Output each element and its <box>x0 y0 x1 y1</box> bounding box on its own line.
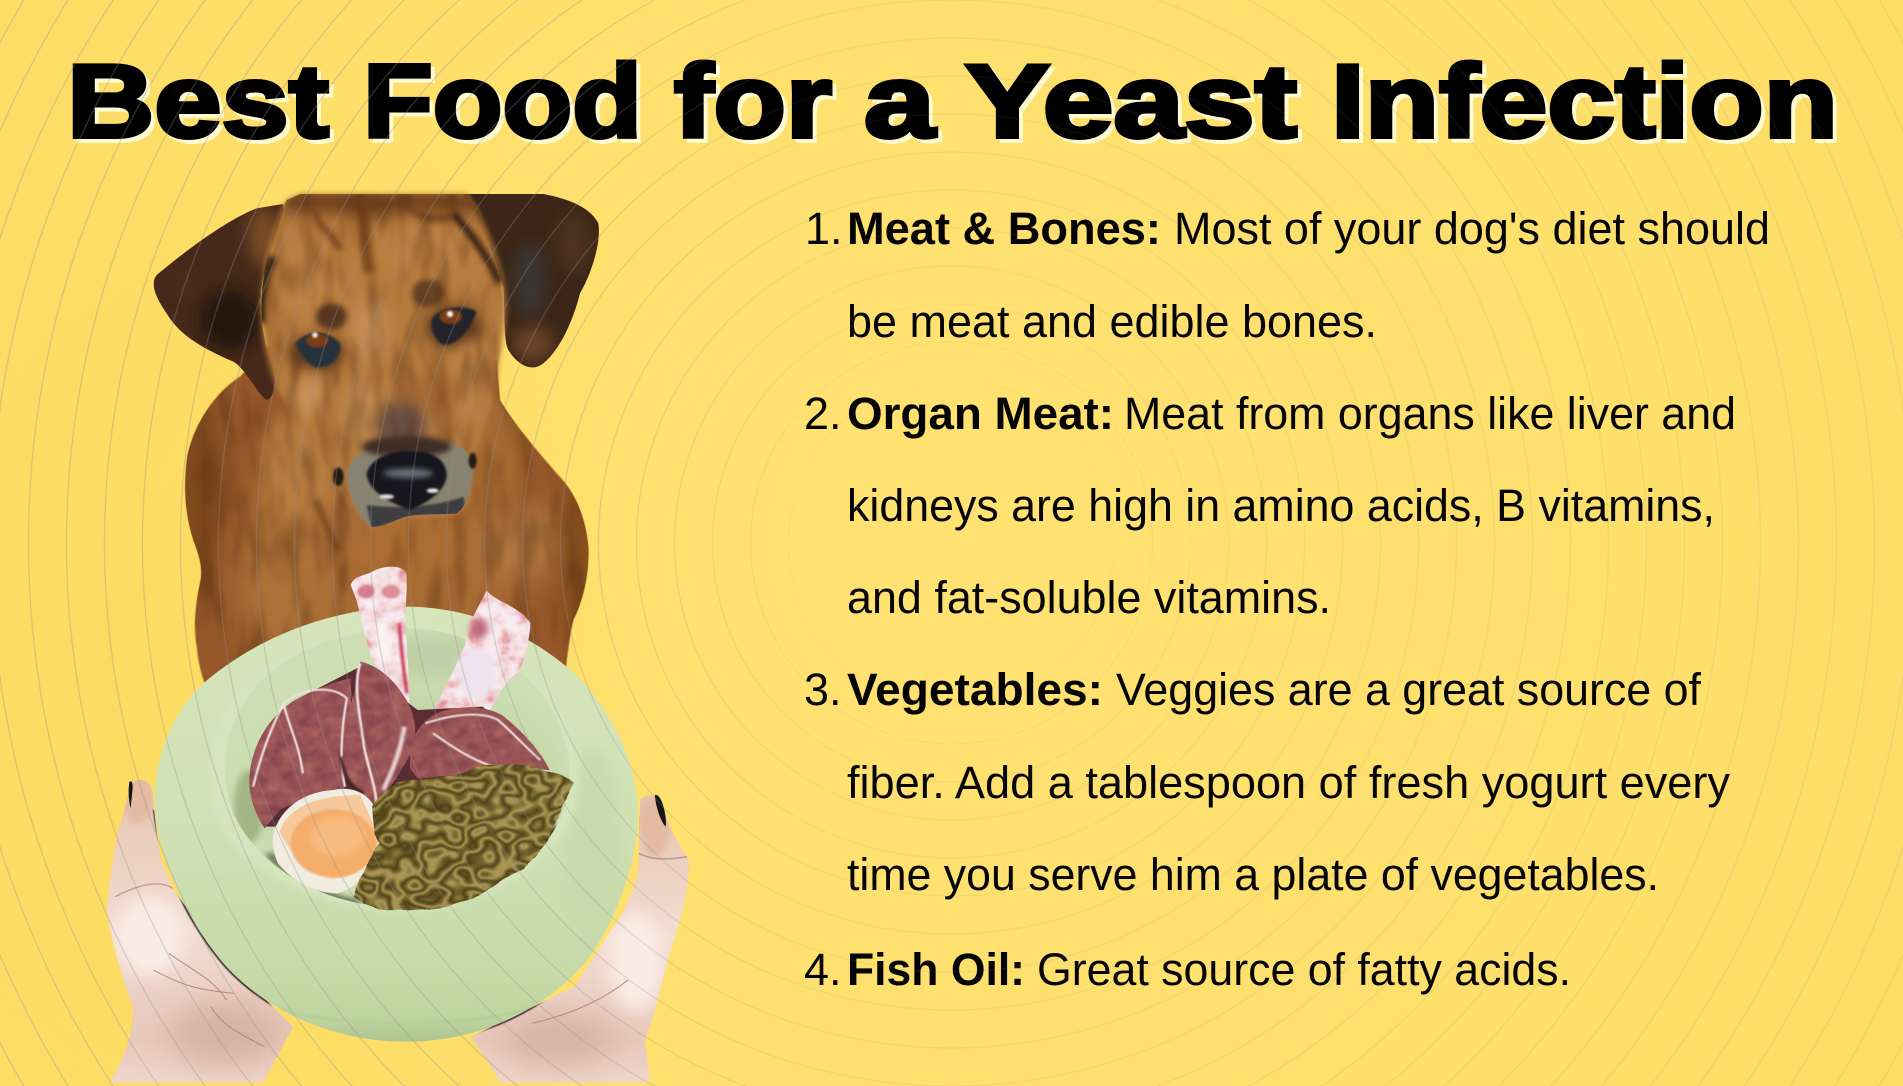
item 2: organ meat <box>804 388 1736 623</box>
item 4: fish oil <box>804 944 1571 995</box>
item 1: meat and bones: Most of your dog's diet should <box>1174 203 1770 254</box>
item 3: vegetables: fiber. Add a tablespoon of fresh yogurt every <box>847 757 1730 808</box>
green bowl <box>155 607 638 1052</box>
egg <box>273 789 380 893</box>
item 2: organ meat: kidneys are high in amino acids, B vitamins, <box>847 480 1715 531</box>
meat right <box>410 707 550 778</box>
meat centre <box>341 662 415 806</box>
dog body <box>184 346 590 683</box>
illustration: dog looking at bowl held by hands <box>100 190 697 1086</box>
dog <box>150 190 603 720</box>
item 3: vegetables <box>804 664 1730 900</box>
item 1: meat and bones <box>805 203 1770 347</box>
item 3: vegetables: 3. <box>804 664 842 715</box>
main title <box>67 44 1838 160</box>
bone left <box>351 567 409 703</box>
item 3: vegetables: Vegetables: <box>847 664 1103 715</box>
numbered food list <box>804 203 1770 995</box>
item 2: organ meat: Organ Meat: <box>847 388 1114 439</box>
left ear <box>150 200 283 403</box>
bowl cavity <box>225 628 570 908</box>
nose <box>367 451 447 510</box>
muzzle spot <box>333 467 344 486</box>
main title: a <box>864 44 936 160</box>
meat backing <box>250 667 549 827</box>
item 4: fish oil: Fish Oil: <box>847 944 1025 995</box>
item 3: vegetables: time you serve him a plate of vegetables. <box>847 849 1659 900</box>
tripe <box>353 764 575 911</box>
item 1: meat and bones: be meat and edible bones. <box>847 296 1377 347</box>
main title: Infection <box>1331 44 1838 160</box>
hands and bowl <box>100 567 697 1086</box>
main title: Food <box>363 44 642 160</box>
dog face <box>261 190 507 533</box>
bowl ledge <box>209 622 579 912</box>
right muzzle spot <box>469 453 477 469</box>
meat left <box>249 678 351 828</box>
left eye <box>295 332 340 367</box>
item 4: fish oil: 4. <box>804 944 842 995</box>
main title: Best <box>67 44 329 160</box>
item 1: meat and bones: Meat & Bones: <box>847 203 1161 254</box>
main title: Yeast <box>965 44 1297 160</box>
item 4: fish oil: Great source of fatty acids. <box>1037 944 1571 995</box>
left hand <box>107 780 294 1082</box>
left thumb nail <box>129 781 133 808</box>
main title: for <box>674 44 832 160</box>
item 2: organ meat: 2. <box>804 388 842 439</box>
right thumb nail <box>655 795 666 827</box>
item 2: organ meat: Meat from organs like liver and <box>1124 388 1736 439</box>
item 2: organ meat: and fat-soluble vitamins. <box>847 572 1331 623</box>
right ear <box>460 193 603 373</box>
item 3: vegetables: Veggies are a great source of <box>1116 664 1701 715</box>
right eye <box>431 308 477 345</box>
bone right <box>433 591 531 713</box>
right hand <box>471 796 689 1082</box>
item 1: meat and bones: 1. <box>805 203 843 254</box>
muzzle <box>347 443 473 528</box>
